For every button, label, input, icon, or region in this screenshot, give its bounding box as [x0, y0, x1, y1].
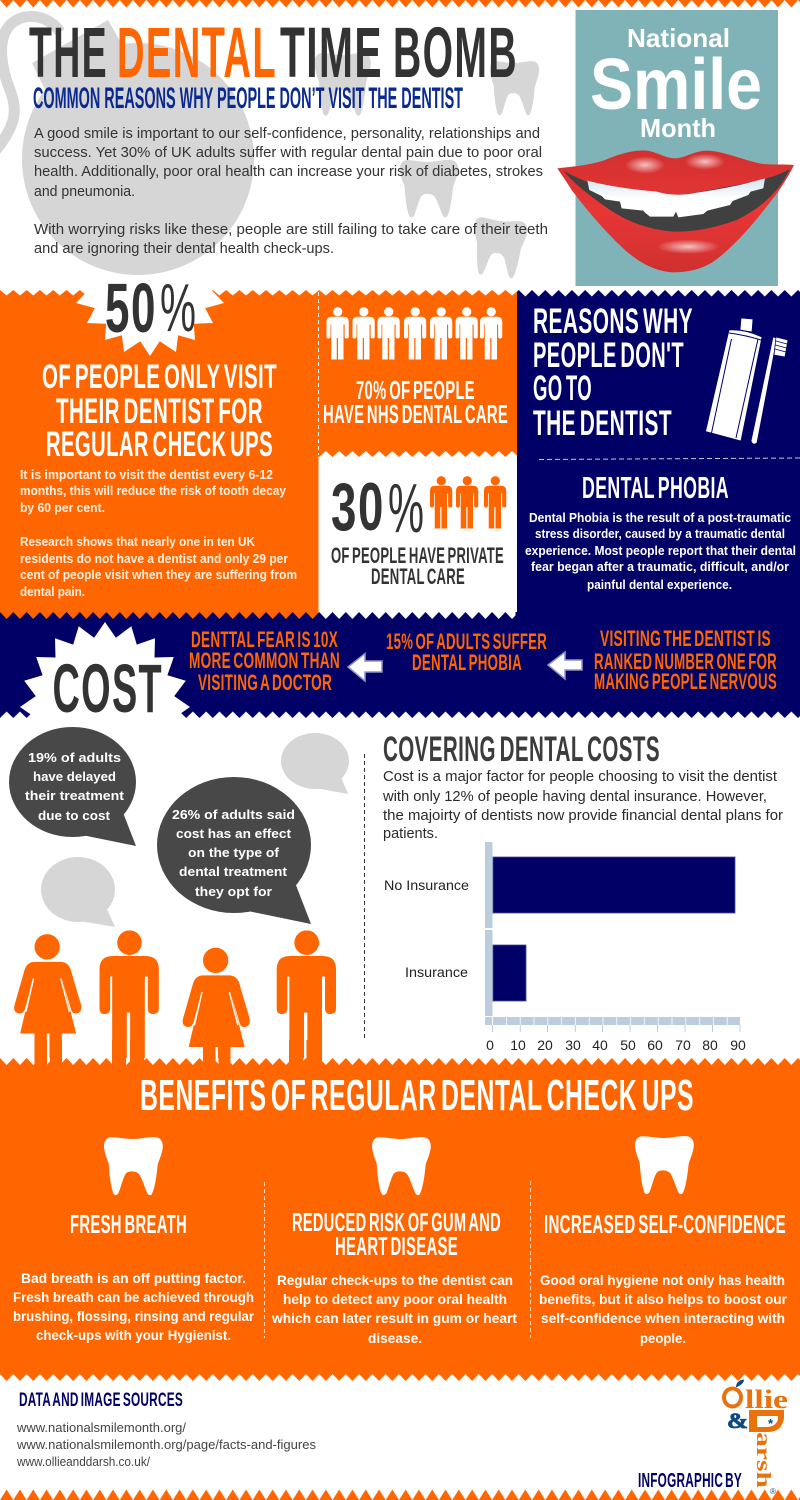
- panel: 50 percent regular check ups: [0, 269, 800, 615]
- icon: tooth: [635, 1136, 694, 1194]
- title: DENTAL: [117, 14, 277, 93]
- heading: REASONS WHY: [533, 302, 693, 341]
- benefit: reduced risk: REDUCED RISK OF GUM AND: [292, 1207, 501, 1237]
- poster heading: Smile: [590, 45, 762, 125]
- bar chart: [384, 842, 746, 1053]
- bottom zigzag border: [0, 1490, 800, 1500]
- benefit: fresh breath: FRESH BREATH: [70, 1209, 187, 1239]
- dental phobia text: fear began after a traumatic, difficult, and/or: [531, 560, 789, 574]
- speech bubble: 26 percent: on the type of: [188, 845, 280, 860]
- benefit: self-confidence: [539, 1136, 788, 1346]
- benefit: reduced risk: [271, 1137, 517, 1346]
- heading: REGULAR CHECK UPS: [46, 425, 273, 464]
- bar chart: Insurance: [405, 964, 468, 980]
- caption: [331, 543, 504, 589]
- caption: HAVE NHS DENTAL CARE: [323, 399, 508, 429]
- vertical dashed divider: [364, 754, 366, 1038]
- fact: fear: DENTTAL FEAR IS 10X: [191, 627, 338, 652]
- top zigzag border: [0, 0, 800, 8]
- panel: benefits of regular check ups: [0, 1040, 800, 1381]
- caption: DENTAL CARE: [371, 564, 465, 589]
- intro text: With worrying risks like these, people are still failing to take care of their teeth: [34, 222, 548, 238]
- speech bubble: blank lower: [41, 857, 115, 927]
- 50 percent figure: 50: [105, 269, 157, 347]
- heading: GO TO: [533, 369, 592, 408]
- speech bubble: 26 percent: [157, 777, 311, 924]
- sources list: www.nationalsmilemonth.org/page/facts-and-figures: [16, 1437, 316, 1452]
- body text: It is important to visit the dentist every 6-12: [20, 468, 273, 482]
- bar chart: 30: [565, 1037, 581, 1053]
- icon: tooth: [104, 1137, 163, 1195]
- dental phobia text: Dental Phobia is the result of a post-traumatic: [529, 511, 791, 525]
- fact: fear: [189, 627, 340, 695]
- 30 percent figure: %: [388, 469, 424, 547]
- people: man 2: [100, 930, 159, 1070]
- speech bubble: 19 percent: due to cost: [38, 808, 111, 823]
- speech bubble: 19 percent: their treatment: [25, 788, 125, 803]
- speech bubble: 19 percent: 19% of adults: [28, 750, 121, 765]
- speech bubble: 26 percent: dental treatment: [179, 864, 288, 879]
- body text: with only 12% of people having dental insurance. However,: [382, 789, 767, 805]
- fact: phobia: DENTAL PHOBIA: [412, 650, 522, 675]
- speech bubble: 26 percent: cost has an effect: [176, 826, 292, 841]
- caption: OF PEOPLE HAVE PRIVATE: [331, 543, 504, 568]
- icon: toothpaste and toothbrush: [706, 318, 788, 444]
- panel: data and image sources: [16, 1390, 316, 1469]
- orange people icons: [430, 476, 506, 528]
- panel: cost band: [0, 612, 800, 727]
- speech bubble: 19 percent: have delayed: [33, 769, 116, 784]
- white people icons: [326, 307, 502, 360]
- bar chart: No Insurance: [384, 877, 469, 893]
- benefit: self-confidence: self-confidence when interacting with: [541, 1310, 785, 1326]
- logo: ollie and darsh: ®: [770, 1487, 776, 1496]
- sources list: [16, 1420, 316, 1469]
- benefit: reduced risk: HEART DISEASE: [335, 1231, 458, 1261]
- benefit: fresh breath: [13, 1137, 255, 1343]
- people: man 4: [277, 930, 336, 1070]
- heading: THEIR DENTIST FOR: [56, 392, 263, 431]
- body text: patients.: [383, 826, 438, 842]
- speech bubble: 26 percent: 26% of adults said: [172, 807, 295, 822]
- logo: ollie and darsh: [724, 1380, 788, 1496]
- poster heading: Month: [640, 113, 716, 143]
- body text: the majoirty of dentists now provide financial dental plans for: [383, 808, 783, 824]
- panel: covering dental costs: [382, 730, 783, 1053]
- logo: ollie and darsh: *: [768, 1416, 774, 1431]
- intro text: success. Yet 30% of UK adults suffer with regular dental pain due to poor oral: [34, 145, 542, 161]
- body text: residents do not have a dentist and only 29 per: [20, 552, 288, 566]
- body text: Cost is a major factor for people choosing to visit the dentist: [383, 769, 777, 785]
- heading: OF PEOPLE ONLY VISIT: [42, 358, 277, 396]
- bar chart: 70: [675, 1037, 691, 1053]
- benefit: reduced risk: which can later result in gum or heart: [271, 1310, 517, 1326]
- dental phobia text: painful dental experience.: [587, 578, 732, 592]
- people legs over border: [34, 1040, 322, 1065]
- title: [29, 14, 518, 93]
- speech bubble: blank top: [281, 733, 349, 794]
- title: BOMB: [393, 14, 518, 93]
- title: THE: [29, 14, 108, 93]
- benefit: fresh breath: Fresh breath can be achieved through: [13, 1289, 254, 1305]
- bar chart: 60: [647, 1037, 663, 1053]
- body text: by 60 per cent.: [20, 501, 105, 515]
- benefit: reduced risk: help to detect any poor oral health: [283, 1291, 507, 1307]
- intro text: A good smile is important to our self-confidence, personality, relationships and: [34, 126, 540, 142]
- poster heading: [590, 23, 762, 143]
- body text: [20, 468, 297, 599]
- benefit: reduced risk: Regular check-ups to the dentist can: [277, 1272, 513, 1288]
- dental phobia text: stress disorder, caused by a traumatic dental: [535, 527, 785, 541]
- heading: [42, 358, 277, 464]
- bar chart: 20: [537, 1037, 553, 1053]
- benefit: reduced risk: disease.: [368, 1330, 422, 1346]
- body text: [382, 769, 783, 842]
- dental phobia text: [525, 511, 796, 592]
- sources list: www.ollieanddarsh.co.uk/: [16, 1454, 150, 1469]
- fact: fear: VISITING A DOCTOR: [198, 670, 332, 695]
- dental phobia text: experience. Most people report that their dental: [525, 544, 796, 558]
- background bomb illustration: [0, 16, 254, 275]
- starburst: [20, 622, 190, 725]
- people: woman 3: [183, 948, 250, 1070]
- intro text: and pneumonia.: [34, 184, 135, 200]
- caption: [323, 375, 508, 429]
- background teeth: [314, 53, 539, 280]
- 50 percent figure: %: [160, 270, 196, 346]
- fact: nervous: [594, 626, 777, 694]
- panel: reasons why people don't go: [517, 290, 800, 615]
- logo: ollie and darsh: llie: [745, 1385, 788, 1414]
- 30 percent figure: 30: [331, 469, 385, 545]
- logo: ollie and darsh: &: [727, 1408, 748, 1433]
- panel: 70 percent NHS care: [318, 290, 517, 458]
- fact: phobia: [386, 629, 547, 675]
- smiling lips: [557, 150, 794, 272]
- logo: ollie and darsh: arsh: [752, 1432, 774, 1488]
- dashed divider: [539, 458, 800, 460]
- body text: Research shows that nearly one in ten UK: [20, 535, 255, 549]
- title: TIME: [280, 14, 383, 93]
- sources heading: DATA AND IMAGE SOURCES: [19, 1390, 183, 1411]
- poster heading: National: [627, 23, 730, 53]
- speech bubble: 19 percent: [9, 727, 136, 846]
- benefit: self-confidence: Good oral hygiene not only has health: [540, 1272, 785, 1288]
- panel: national smile month poster: [557, 10, 794, 286]
- bar chart: 0: [486, 1037, 494, 1053]
- body text: months, this will reduce the risk of tooth decay: [20, 484, 286, 498]
- panel: speech bubbles and people: [9, 727, 349, 1070]
- benefit: fresh breath: Bad breath is an off putting factor.: [21, 1270, 246, 1286]
- heading: THE DENTIST: [533, 404, 672, 443]
- body text: dental pain.: [20, 585, 85, 599]
- heading: PEOPLE DON'T: [533, 336, 684, 375]
- starburst: [76, 282, 224, 356]
- benefit: self-confidence: people.: [640, 1330, 686, 1346]
- arrow: [348, 654, 382, 681]
- fact: fear: MORE COMMON THAN: [189, 648, 340, 673]
- speech bubble: 26 percent: they opt for: [195, 884, 272, 899]
- intro text: health. Additionally, poor oral health can increase your risk of diabetes, strokes: [34, 164, 543, 180]
- arrow: [548, 652, 582, 679]
- body text: cent of people visit when they are suffering from: [20, 568, 297, 582]
- intro text: [34, 126, 548, 257]
- intro text: and are ignoring their dental health check-ups.: [34, 241, 334, 257]
- benefit: self-confidence: benefits, but it also helps to boost our: [539, 1291, 788, 1307]
- heading: [533, 302, 693, 443]
- benefit: fresh breath: check-ups with your Hygienist.: [36, 1327, 231, 1343]
- bar chart: 80: [702, 1037, 718, 1053]
- bar chart: 40: [592, 1037, 608, 1053]
- sources list: www.nationalsmilemonth.org/: [16, 1420, 186, 1435]
- people: woman 1: [14, 934, 81, 1070]
- cost heading: COST: [52, 650, 163, 727]
- panel: 30 percent private care: [318, 451, 517, 615]
- bar chart: 10: [510, 1037, 526, 1053]
- fact: phobia: 15% OF ADULTS SUFFER: [386, 629, 547, 654]
- bar chart: 90: [730, 1037, 746, 1053]
- benefit: fresh breath: brushing, flossing, rinsing and regular: [13, 1308, 255, 1324]
- icon: tooth: [372, 1137, 431, 1195]
- bar chart: 50: [620, 1037, 636, 1053]
- caption: 70% OF PEOPLE: [356, 375, 475, 405]
